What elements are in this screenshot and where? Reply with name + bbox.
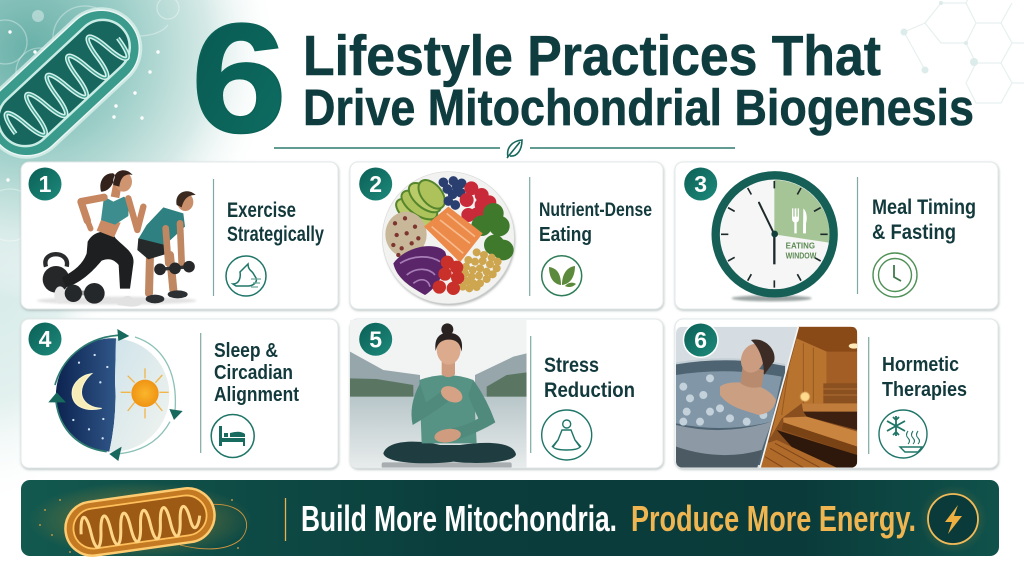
number badge 2 [359,168,392,200]
number badge 2: 2 [369,171,382,197]
icon: bed [211,414,254,458]
panel: stress reduction [350,319,663,468]
photo: ice bath and sauna [676,327,859,468]
day half [109,338,169,452]
label: Hormetic Therapies [882,353,967,401]
illustration: woman and man exercising [37,170,197,307]
label: Nutrient-Dense Eating [539,199,652,246]
banner text: produce more energy: Produce More Energy. [631,498,916,539]
label: Sleep & Circadian Alignment: Sleep & [214,339,278,362]
label: Nutrient-Dense Eating: Nutrient-Dense [539,199,652,221]
card 3 background [675,162,998,309]
label: Stress Reduction: Stress [544,354,599,377]
icon: snowflake and steam [879,410,927,458]
number badge 4: 4 [39,326,52,352]
icon: fork and knife [792,208,807,233]
icon: floor dumbbell [65,283,105,304]
card 1 background [21,162,338,309]
banner: closing message [21,480,999,559]
food: strawberries [467,188,489,215]
number badge 6 [683,322,719,358]
label: Meal Timing & Fasting: Meal Timing [872,196,976,219]
panel: hormetic therapies [675,319,998,468]
title [191,0,974,166]
icon: lightning bolt [919,485,987,553]
number badge 4 [28,322,62,356]
icon: clock [873,253,917,297]
card 5 background [350,319,663,468]
food: tomatoes [439,262,458,288]
label: Meal Timing & Fasting [872,196,976,244]
food: broccoli [482,213,503,250]
label: Stress Reduction: Reduction [544,379,635,402]
card 2 background [350,162,663,309]
number badge 5: 5 [369,326,382,352]
illustration: clock with eating window [716,175,834,301]
label: Sleep & Circadian Alignment: Alignment [214,383,299,406]
moon [72,374,102,410]
photo: woman breathing by a lake [350,320,527,468]
illustration: food plate [382,172,515,306]
number badge 6: 6 [694,327,707,353]
eating window label [786,241,817,260]
eating window label: WINDOW [786,250,817,260]
label: Hormetic Therapies: Hormetic [882,353,959,376]
label: Stress Reduction [544,354,635,402]
food: red cabbage [393,246,447,295]
food: blueberries [443,181,462,205]
label: Sleep & Circadian Alignment [214,339,299,406]
number badge 3 [684,168,717,200]
hand on chest [438,383,465,406]
panel: meal timing and fasting [675,162,998,309]
panel: nutrient-dense eating [350,162,663,309]
food: chickpeas [463,252,498,288]
sauna [760,327,859,468]
number badge 3: 3 [694,171,707,197]
night half [56,338,116,452]
figure: man [137,191,196,303]
banner text: build more mitochondria: Build More Mitochondria. [301,498,617,539]
number badge 5 [359,323,392,356]
title divider with leaf [274,140,735,158]
label: Sleep & Circadian Alignment: Circadian [214,361,293,384]
food: quinoa [385,212,427,257]
label: Exercise Strategically: Exercise [227,199,296,222]
icon: leaves [542,256,582,296]
panel: sleep and circadian alignment [21,319,338,468]
icon: meditation [542,410,592,460]
icon: running shoe [226,256,266,296]
label: Exercise Strategically: Strategically [227,223,324,246]
number badge 1: 1 [39,171,52,197]
banner background [21,480,999,556]
label: Hormetic Therapies: Therapies [882,378,967,401]
figure: meditating woman [383,323,516,463]
illustration: day and night cycle [48,329,183,461]
card 6 background [675,319,998,468]
food: salmon [424,207,483,262]
figure: man in ice bath [720,339,776,415]
illustration: glowing mitochondrion [28,482,252,559]
label: Meal Timing & Fasting: & Fasting [872,221,956,244]
hand on belly [434,427,462,444]
cycle arrows [48,329,183,461]
panel: exercise strategically [21,162,338,309]
sun [121,368,169,418]
eating window label: EATING [786,241,815,251]
mitochondrion illustration [0,0,159,176]
title line 1: Lifestyle Practices That [303,24,881,88]
food: avocado [391,175,450,233]
card 4 background [21,319,338,468]
ice bath [676,327,799,468]
woman leggings [62,232,134,289]
label: Nutrient-Dense Eating: Eating [539,223,592,246]
icon: kettlebell [43,254,69,293]
decoration: hexagon network [900,0,1024,103]
label: Exercise Strategically [227,199,324,246]
number badge 1 [28,168,62,200]
